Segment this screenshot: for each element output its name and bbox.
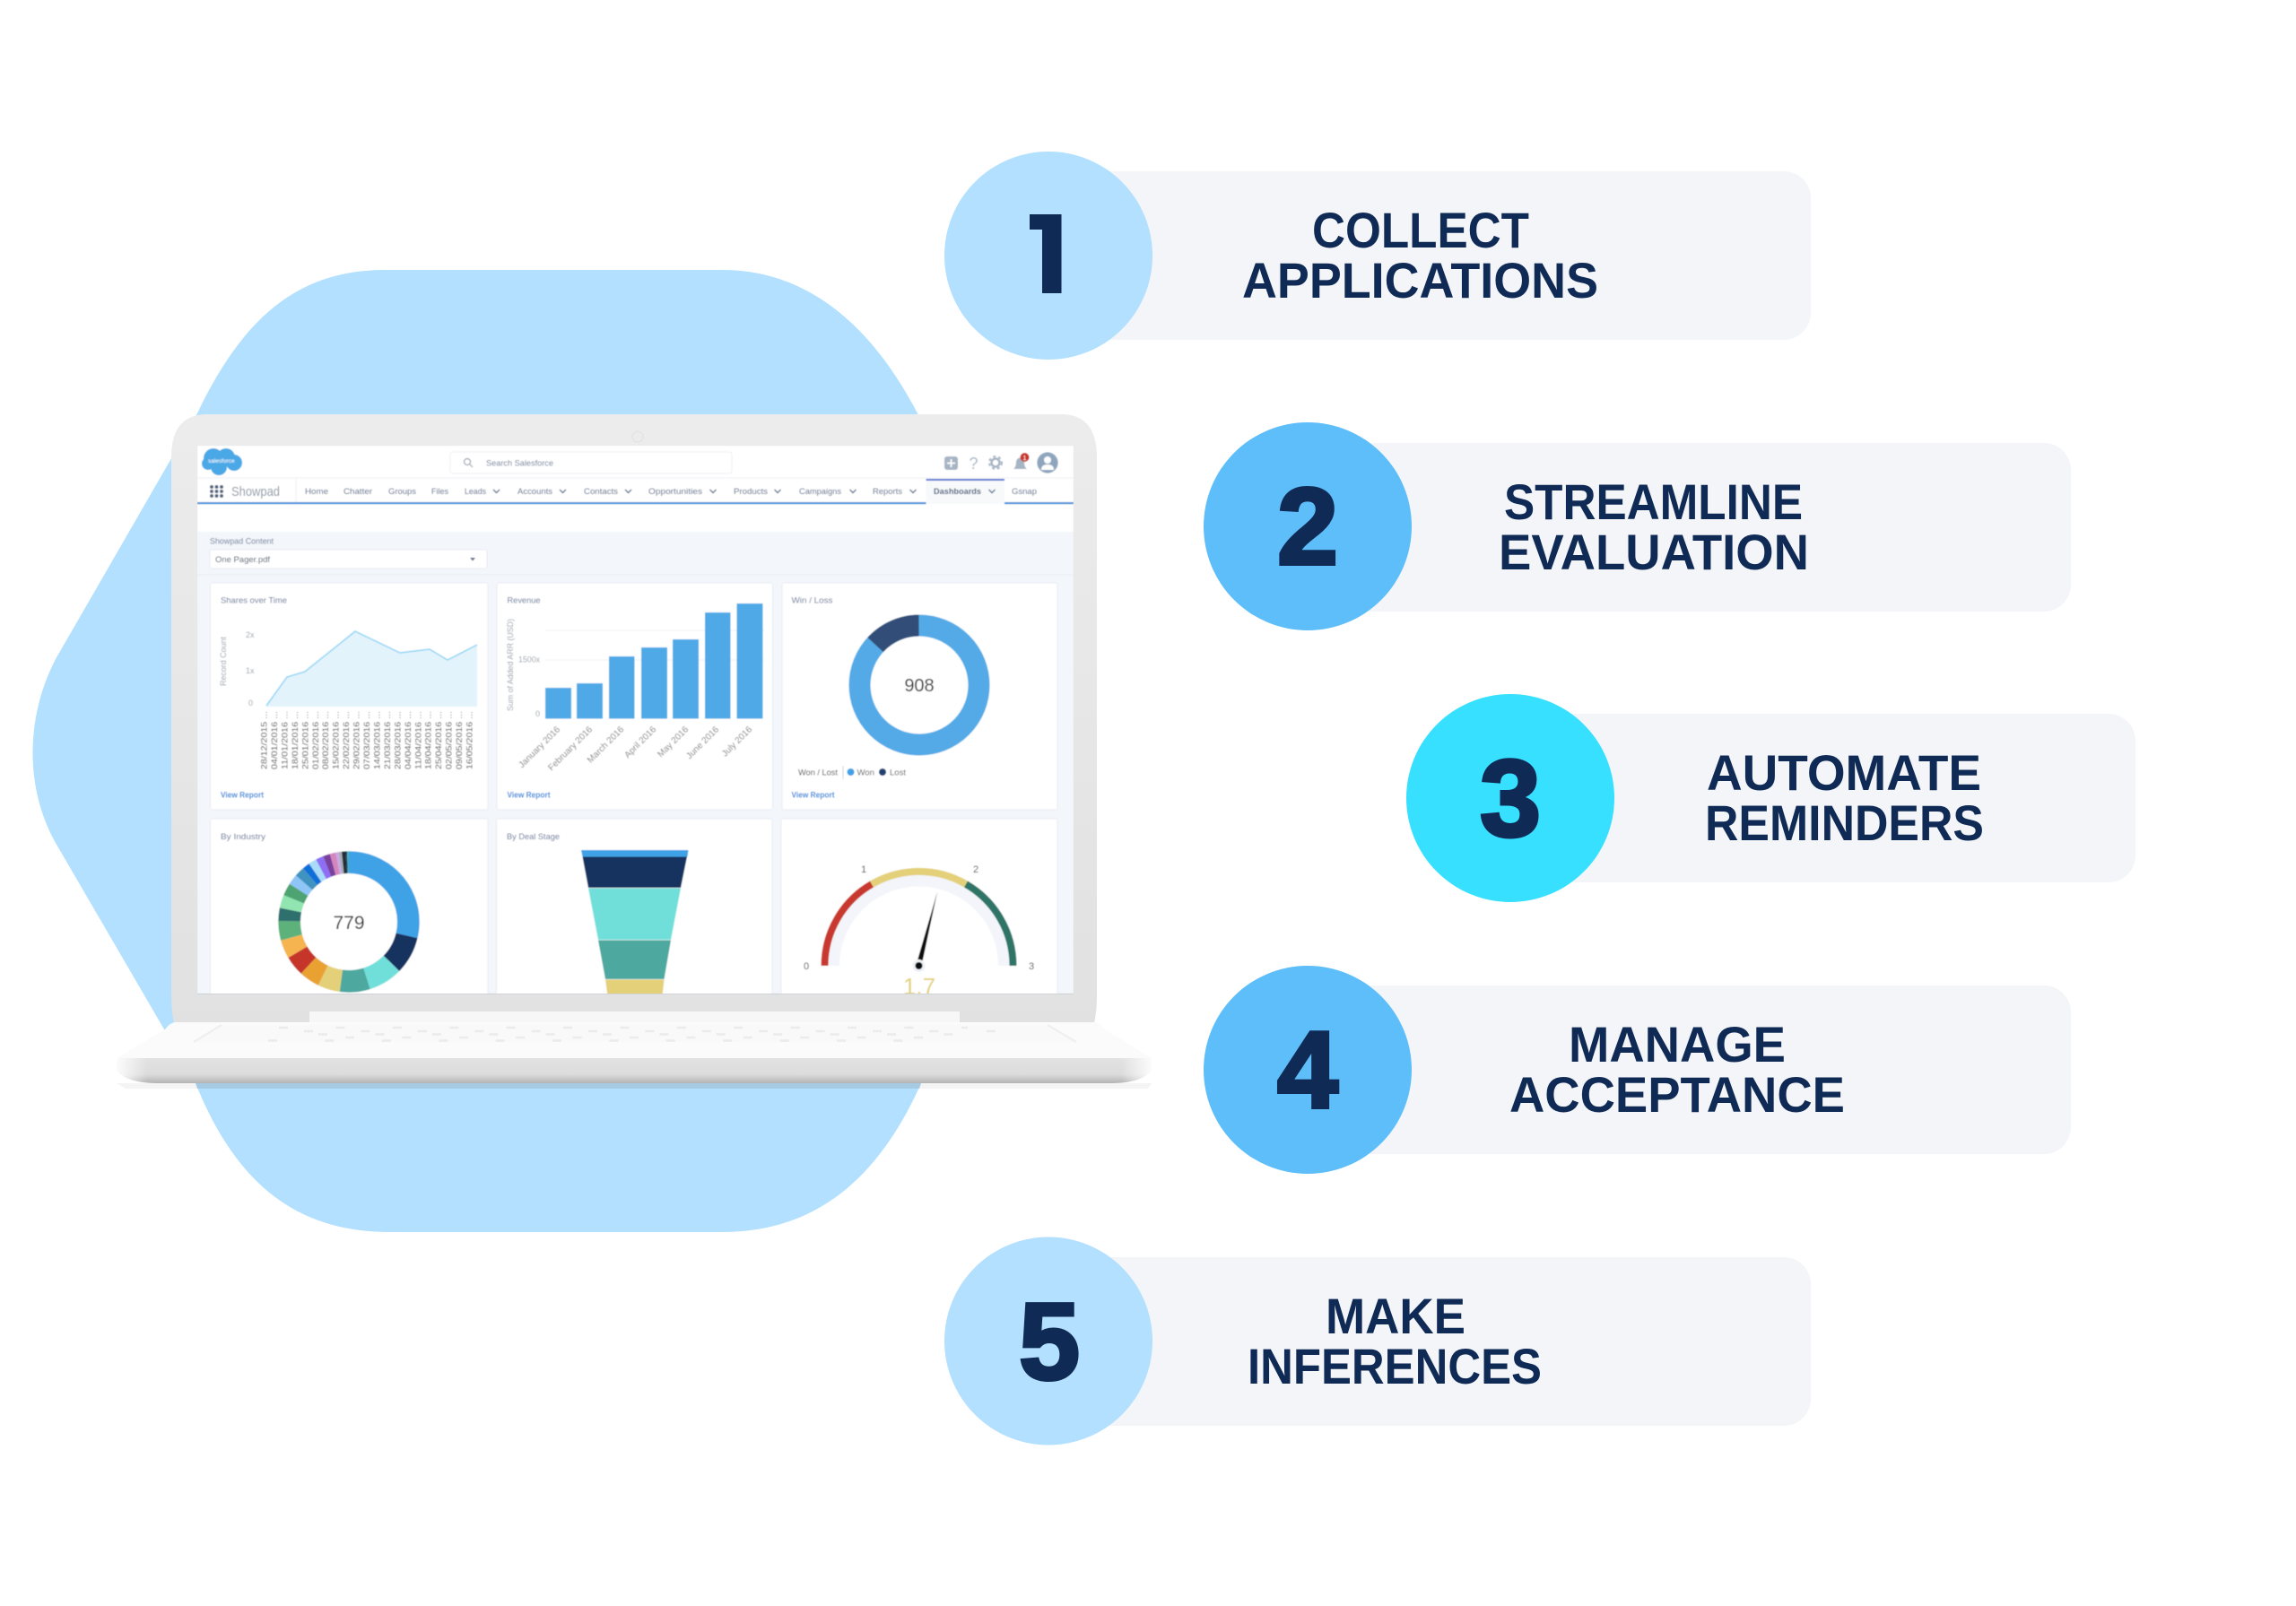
card: win loss: Win / Loss [791,595,833,606]
navigation bar: Campaigns [799,487,841,497]
date axis labels: 16/05/2016 ... [465,711,474,769]
step 3 heading [1705,744,1984,851]
funnel chart [581,850,689,995]
hinge [309,1011,960,1023]
month labels: March 2016 [586,725,626,765]
navigation bar: Leads [465,487,486,497]
card: revenue: 0 [535,709,540,718]
date axis labels: 09/05/2016 ... [455,711,464,769]
legend [798,766,906,779]
gauge chart: 1.7 [903,973,935,1000]
step 3 circle [1406,694,1614,902]
navigation bar: Showpad [231,484,280,499]
date axis labels: 15/02/2016 ... [332,711,341,769]
date axis labels: 21/03/2016 ... [383,711,392,769]
card: by industry: 779 [333,913,365,933]
step 2 pill [1308,443,2071,612]
legend: Lost [890,768,906,778]
navigation bar: Files [431,487,448,497]
gauge chart: 0 [804,961,809,972]
legend: Won [857,768,874,778]
card: by deal stage: By Deal Stage [507,832,560,842]
navigation bar: Dashboards [934,487,981,497]
step 5 heading: MAKE [1326,1288,1465,1344]
laptop screen dashboard [197,446,1074,1007]
donut 908 [859,626,979,744]
hexagon backdrop [32,270,1078,1232]
header icons [944,452,1058,473]
date axis labels: 14/03/2016 ... [373,711,382,769]
step 4 heading: ACCEPTANCE [1509,1066,1845,1123]
step 3 [1406,694,2135,902]
month labels: May 2016 [656,725,691,760]
step 4 heading: MANAGE [1569,1016,1786,1072]
gauge chart: 3 [1029,961,1034,972]
step 1 heading: COLLECT [1312,202,1529,258]
step 2 heading [1499,473,1809,580]
date axis labels: 04/04/2016 ... [404,711,413,769]
step 3 heading: AUTOMATE [1707,744,1981,801]
step 4 circle [1204,966,1412,1174]
keys [268,1028,998,1040]
date axis labels [260,711,474,769]
date axis labels: 29/02/2016 ... [352,711,361,769]
card: shares over time [210,583,488,810]
month labels: July 2016 [720,725,754,759]
date axis labels: 07/03/2016 ... [362,711,371,769]
search box: Search Salesforce [486,459,553,468]
date axis labels: 08/02/2016 ... [321,711,330,769]
step 1 heading: APPLICATIONS [1242,252,1598,308]
date axis labels: 18/04/2016 ... [424,711,433,769]
card: by industry [210,819,488,1007]
card: revenue [497,583,773,810]
card: shares over time: 0 [248,699,253,708]
laptop [117,414,1152,1089]
step 1 number: 1 [1020,195,1081,317]
navigation bar: Reports [873,487,902,497]
step 3 pill [1510,714,2135,882]
gauge chart: 2 [973,864,978,875]
navigation bar: Accounts [517,487,552,497]
date axis labels: 01/02/2016 ... [311,711,320,769]
navigation bar: Opportunities [648,487,702,497]
showpad content filter [210,538,486,568]
card: by industry: By Industry [221,832,265,842]
date axis labels: 28/12/2015 ... [260,711,269,769]
step 1 pill [1048,171,1811,340]
step 2 [1204,422,2071,630]
card: shares over time: 2x [246,630,255,639]
navigation bar: Contacts [584,487,618,497]
step 5 heading [1248,1288,1542,1394]
card: gauge [781,819,1057,1007]
step 2 number: 2 [1277,465,1338,587]
month labels: January 2016 [517,725,562,770]
card: shares over time: 1x [246,666,255,675]
gauge chart [804,864,1034,1000]
header icons: 1 [1022,454,1027,462]
step 5 [944,1237,1811,1445]
date axis labels: 28/03/2016 ... [393,711,402,769]
card: by deal stage [497,819,772,1007]
date axis labels: 11/04/2016 ... [413,711,422,769]
step 2 circle [1204,422,1412,630]
card: shares over time: Record Count [219,637,228,686]
step 4 [1204,966,2071,1174]
step 1 [944,152,1811,360]
bar chart [545,603,762,719]
card: win loss: View Report [791,791,835,800]
legend: Won / Lost [798,768,838,778]
step 5 number: 5 [1019,1280,1080,1402]
navigation bar: Home [305,487,328,497]
keyboard deck [117,1022,1152,1058]
step 1 number [1030,214,1062,293]
step 5 heading: INFERENCES [1248,1338,1542,1394]
date axis labels: 25/01/2016 ... [300,711,309,769]
month labels: February 2016 [546,725,595,773]
step 4 heading [1509,1016,1845,1123]
step 2 heading: EVALUATION [1499,524,1809,580]
date axis labels: 11/01/2016 ... [280,711,289,769]
date axis labels: 04/01/2016 ... [270,711,279,769]
showpad content filter: Showpad Content [210,536,274,547]
step 3 heading: REMINDERS [1705,794,1984,851]
header icons: ? [969,455,978,473]
navigation bar: Groups [388,487,416,497]
step 2 heading: STREAMLINE [1504,473,1803,530]
card: revenue: 1500x [518,655,540,664]
step 5 circle [944,1237,1152,1445]
salesforce logo: salesforce [208,458,235,464]
card: win loss [782,583,1057,810]
card: revenue: View Report [508,791,551,800]
laptop shadow [117,1083,1152,1089]
step 5 pill [1048,1257,1811,1426]
month labels: April 2016 [623,725,658,760]
showpad content filter: One Pager.pdf [215,555,270,565]
gauge chart: 1 [861,864,866,875]
navigation bar: Products [734,487,768,497]
date axis labels: 22/02/2016 ... [342,711,351,769]
laptop lid [171,414,1097,1027]
date axis labels: 25/04/2016 ... [434,711,443,769]
gauge needle [917,892,937,966]
webcam [632,431,643,442]
card: revenue: Sum of Added ARR (USD) [506,619,515,711]
area chart [266,631,477,707]
navigation bar: Chatter [344,487,372,497]
card: shares over time: Shares over Time [221,595,287,606]
month labels [517,725,754,773]
step 1 circle [944,152,1152,360]
laptop front edge [117,1058,1152,1083]
navigation bar: Gsnap [1012,487,1037,497]
salesforce logo [202,448,242,475]
donut 779 [290,863,408,981]
search box [450,452,732,473]
step 4 number: 4 [1277,1009,1338,1131]
step 3 number: 3 [1480,737,1541,859]
card: revenue: Revenue [508,595,540,606]
step 1 heading [1242,202,1598,308]
navigation bar [197,478,1074,504]
donut 908: 908 [904,676,935,696]
month labels: June 2016 [684,725,721,761]
step 4 pill [1308,985,2071,1154]
card: shares over time: View Report [221,791,265,800]
date axis labels: 02/05/2016 ... [445,711,454,769]
date axis labels: 18/01/2016 ... [291,711,300,769]
